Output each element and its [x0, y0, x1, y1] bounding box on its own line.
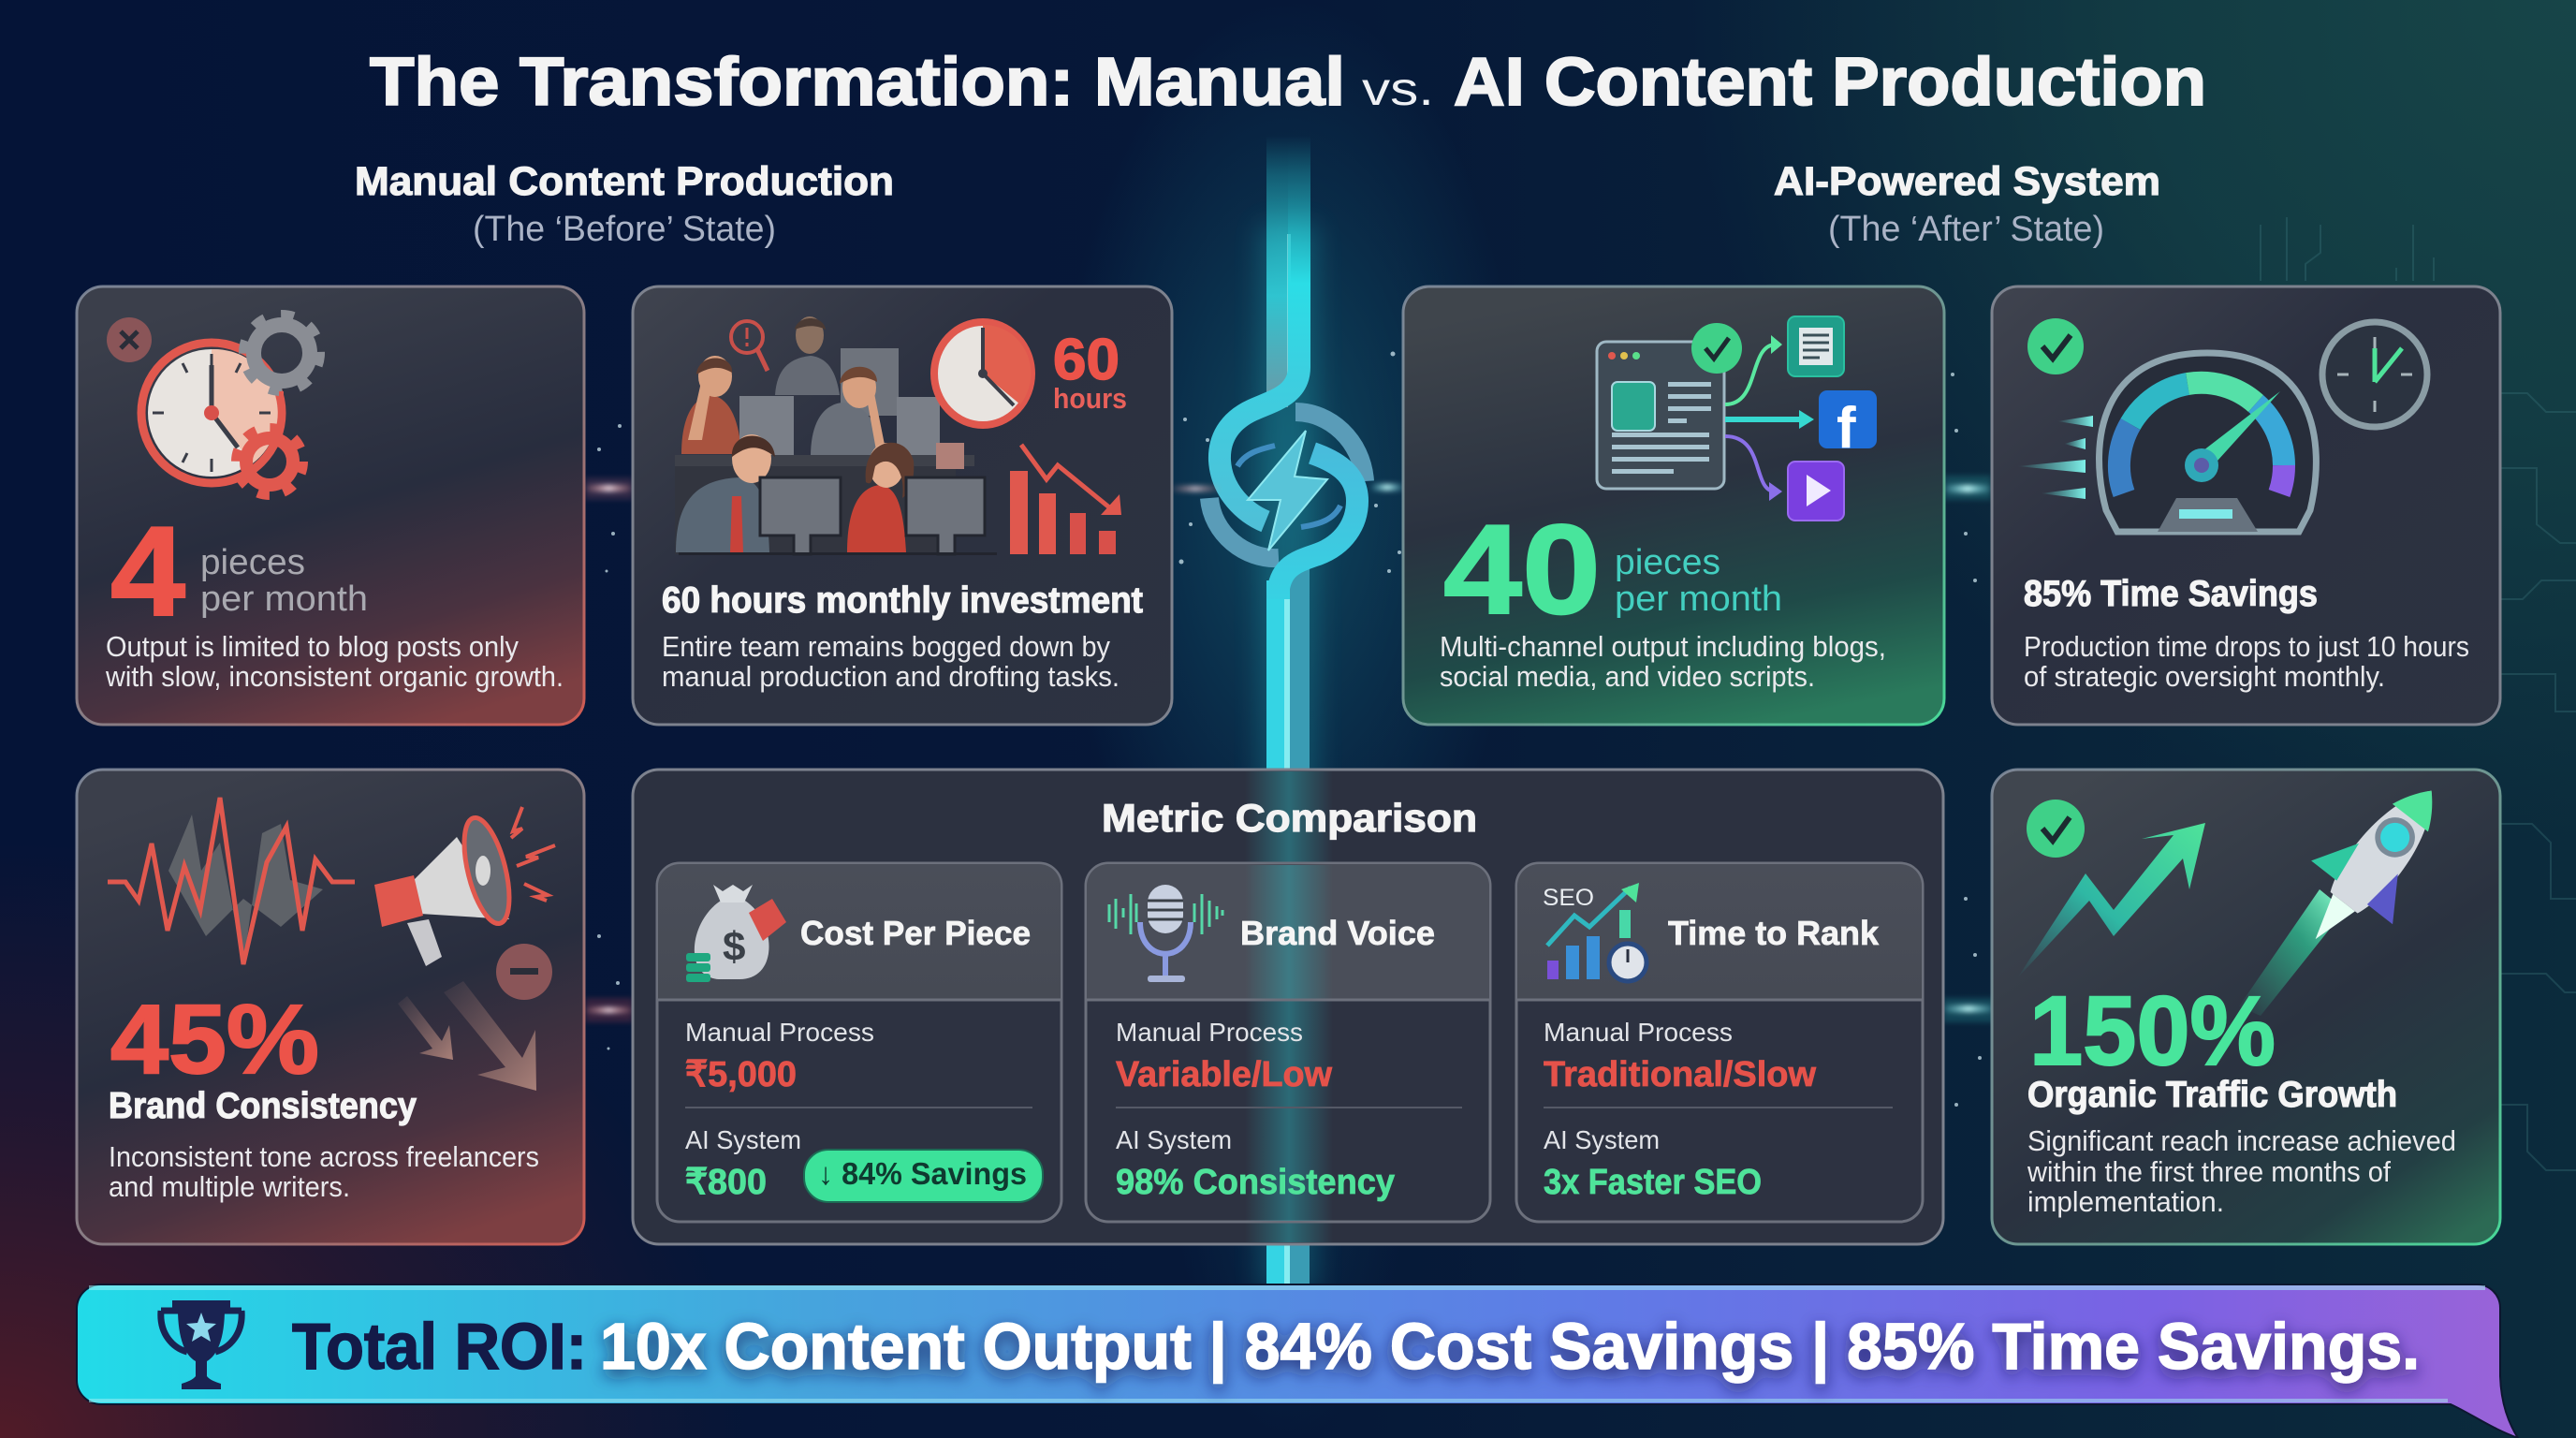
description	[2024, 630, 2469, 693]
label: 60 hours badge: hours	[1053, 382, 1127, 415]
icon: lightning bolt	[1248, 431, 1327, 550]
title	[370, 45, 2206, 120]
description: social media, and video scripts.	[1440, 660, 1815, 693]
emblem: S ribbons	[1220, 136, 1357, 599]
heading: AI column: (The ‘After’ State)	[1828, 210, 2104, 249]
panel: metric comparison	[633, 770, 1943, 1244]
stat: 4: 4	[110, 500, 185, 642]
speed lines	[2017, 416, 2093, 499]
description: with slow, inconsistent organic growth.	[105, 660, 564, 693]
AI value	[685, 1125, 801, 1202]
card title: Cost Per Piece	[800, 914, 1031, 952]
icon: SEO chart with stopwatch	[1543, 883, 1647, 981]
icon: clock 60 hours	[934, 322, 1032, 425]
emblem: rear arcs	[1209, 412, 1365, 558]
label: 60 hours badge: 60	[1053, 328, 1120, 392]
icon: growth arrow	[2017, 823, 2205, 978]
stat: 45%: 45%	[110, 985, 319, 1094]
manual value	[1544, 1018, 1816, 1094]
description: manual production and drofting tasks.	[662, 660, 1120, 693]
label: 60 hours badge	[1053, 328, 1127, 415]
AI value: AI System	[1116, 1125, 1232, 1154]
connector glows and particles	[585, 352, 1994, 1107]
banner: total ROI	[77, 1284, 2518, 1438]
card title: Time to Rank	[1668, 914, 1880, 952]
icon: speedometer	[2017, 353, 2316, 532]
card: time to rank	[1516, 863, 1923, 1222]
description: Production time drops to just 10 hours	[2024, 630, 2469, 663]
icon: rocket	[2239, 759, 2472, 1016]
chart: falling bars	[1010, 445, 1121, 554]
description	[105, 630, 564, 693]
AI value: AI System	[1544, 1125, 1660, 1154]
icon: minus badge	[496, 944, 552, 1000]
manual value	[685, 1018, 874, 1094]
description: implementation.	[2027, 1185, 2224, 1218]
AI value: 3x Faster SEO	[1544, 1163, 1762, 1202]
label: pieces per month: pieces	[200, 543, 305, 582]
heading: Brand Consistency	[109, 1086, 417, 1126]
description: Inconsistent tone across freelancers	[109, 1140, 539, 1173]
savings pill: ↓ 84% Savings	[818, 1156, 1027, 1191]
illustration: stressed team at desks	[675, 316, 997, 555]
icon: megaphone	[374, 807, 555, 966]
stat: 150%: 150%	[2029, 976, 2276, 1086]
label: pieces per month: pieces	[1615, 543, 1720, 582]
icon: trophy	[161, 1300, 242, 1389]
label: pieces per month	[200, 543, 368, 619]
beam: upper strip	[1266, 136, 1291, 407]
description: Multi-channel output including blogs,	[1440, 630, 1886, 663]
heading: manual column: (The ‘Before’ State)	[473, 210, 776, 249]
label: pieces per month: per month	[200, 580, 368, 619]
heading: AI column: AI-Powered System	[1774, 159, 2160, 204]
savings pill	[804, 1150, 1043, 1202]
title: AI Content Production	[1454, 45, 2206, 120]
panel: 60 hours	[633, 286, 1172, 725]
panel: 150% organic traffic	[1992, 759, 2500, 1244]
icon: declining arrows	[398, 981, 536, 1091]
icon: x badge	[107, 317, 152, 362]
manual value: ₹5,000	[685, 1055, 797, 1094]
title: vs.	[1362, 63, 1434, 115]
icon: facebook f: f	[1837, 396, 1856, 461]
AI value: AI System	[685, 1125, 801, 1154]
label: pieces per month: per month	[1615, 580, 1782, 619]
AI value	[1116, 1125, 1395, 1202]
manual value: Manual Process	[1116, 1018, 1303, 1047]
description: within the first three months of	[2027, 1155, 2391, 1188]
panel: 45% brand consistency	[77, 770, 584, 1244]
description	[2027, 1124, 2456, 1218]
heading: Metric Comparison	[1102, 796, 1477, 840]
panel: 40 pieces per month	[1403, 286, 1944, 725]
label: total ROI: Total ROI:	[292, 1310, 587, 1383]
manual value	[1116, 1018, 1332, 1094]
description: Entire team remains bogged down by	[662, 630, 1110, 663]
description	[1440, 630, 1886, 693]
manual value: Manual Process	[1544, 1018, 1733, 1047]
icon: check badge	[2027, 800, 2085, 858]
AI value	[1544, 1125, 1762, 1202]
title: The Transformation: Manual	[370, 45, 1345, 120]
manual value: Manual Process	[685, 1018, 874, 1047]
heading: 85% Time Savings	[2024, 574, 2318, 614]
label: pieces per month	[1615, 543, 1782, 619]
heading: manual column: Manual Content Production	[355, 159, 894, 204]
icon: money bag	[686, 885, 786, 982]
icon: content window with channels	[1597, 316, 1877, 521]
statement: 10x Content Output | 84% Cost Savings | 85% Time Savings.	[600, 1310, 2420, 1384]
description	[109, 1140, 539, 1203]
AI value: ₹800	[685, 1163, 767, 1202]
heading: Organic Traffic Growth	[2027, 1075, 2397, 1115]
manual value: Variable/Low	[1116, 1055, 1332, 1094]
card title: Brand Voice	[1240, 914, 1435, 952]
card: cost per piece	[657, 863, 1061, 1222]
description: Significant reach increase achieved	[2027, 1124, 2456, 1157]
description: of strategic oversight monthly.	[2024, 660, 2385, 693]
AI value: 98% Consistency	[1116, 1163, 1395, 1202]
description: and multiple writers.	[109, 1170, 350, 1203]
icon: clock	[2322, 322, 2427, 427]
description: Output is limited to blog posts only	[106, 630, 519, 663]
icon: microphone	[1109, 885, 1222, 982]
icon: money bag: $	[723, 924, 745, 970]
central glowing beam and emblem	[1209, 136, 1365, 1292]
description	[662, 630, 1120, 693]
panel: 85% time savings	[1992, 286, 2500, 725]
heading: 60 hours monthly investment	[662, 580, 1143, 621]
icon: erratic waveform	[108, 798, 355, 964]
icon: SEO chart with stopwatch: SEO	[1543, 885, 1594, 911]
panel: 4 pieces per month	[77, 286, 584, 725]
heading: AI column	[1774, 159, 2160, 249]
icon: check badge	[2027, 318, 2084, 374]
icon: clock with gears	[141, 315, 320, 495]
heading: manual column	[355, 159, 894, 249]
stat: 40: 40	[1443, 498, 1601, 640]
beam: lower strip	[1266, 562, 1310, 1284]
card: brand voice	[1086, 863, 1490, 1222]
manual value: Traditional/Slow	[1544, 1055, 1816, 1094]
